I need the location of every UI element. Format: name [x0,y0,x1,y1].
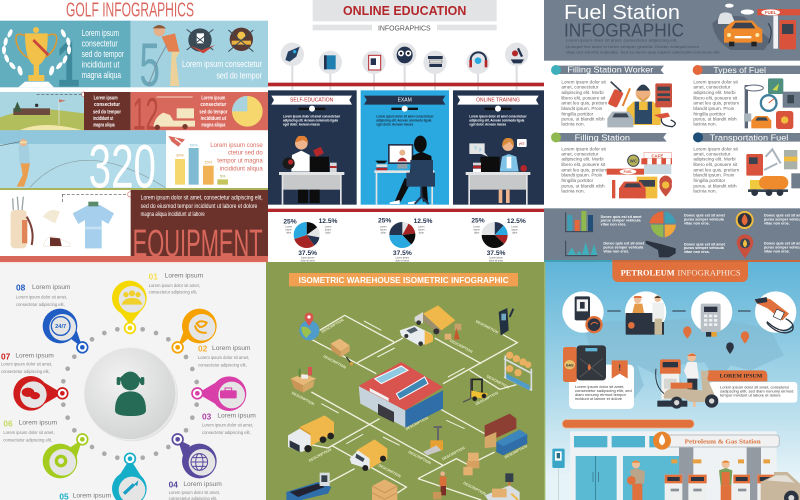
section: filling station: amet leo quis, pretium [561,167,607,172]
conveyor [286,473,331,500]
callout: lorem ipsum: LOREM IPSUM [720,374,763,380]
footer band: purus semper vehicula [684,217,725,221]
band: cart and pie: 12 [133,88,159,139]
title bar: ISOMETRIC WAREHOUSE ISOMETRIC INFOGRAPHIC [299,275,509,285]
arrow [738,310,751,312]
column: self-education [268,90,357,205]
pie chart: exam: 12.5% [414,218,433,225]
node 05 [59,453,147,500]
labels: DESCRIPTION [323,354,347,370]
section: filling station: adipiscing elit. Morbi [561,157,604,162]
step 4 fuel nozzle [755,291,796,333]
node 06: Lorem ipsum dolor sit amet, [3,430,55,435]
callout: jerrycan: GAS [566,363,574,367]
title bar [289,273,518,286]
section: filling station: libero elit, posuere sit [561,162,606,167]
bar chart: 15% [204,159,213,164]
band: trophy: 1 [57,28,80,101]
bar chart [166,130,268,189]
section: filling station: Lorem ipsum dolor sit [561,146,607,151]
band: cart and pie: magna aliqua [201,123,226,129]
node 01: consectetur adipiscing elit, [149,290,197,295]
section: types of fuel: fringilla porttitor [693,111,726,116]
section: transportation fuel: amet, consectetur [693,151,731,156]
section: filling station: Filling Station [575,132,630,142]
node 02: Lorem ipsum [212,345,251,352]
pie chart: online training: ipsum [474,229,480,231]
node 06: 06 [3,419,13,429]
section: filling station worker: amet, consectetur [561,85,599,90]
pie chart: self-education: 37.5% [298,250,317,257]
labels: DESCRIPTION [291,391,315,406]
section: filling station worker: lacinia non. [561,122,585,127]
callout: lorem ipsum: Lorem ipsum dolor sit amet, consetetur [720,385,790,390]
node 06: Lorem ipsum [19,420,58,427]
pie chart: exam: ipsum [418,229,424,231]
pie chart: exam [378,218,433,262]
node 02 [172,309,251,367]
labels: DESCRIPTION [504,444,528,460]
labels: DESCRIPTION [308,447,333,463]
callout: lorem ipsum [707,370,797,403]
labels: DESCRIPTION [321,318,345,334]
callout: jerrycan: consectetur sadipscing elitr, sed [575,388,632,393]
pie chart: online training: dolor [474,231,479,234]
arrows [321,321,465,445]
panel: isometric warehouse [268,262,544,500]
pie chart: exam: Lorem [380,225,387,228]
section: filling station: amet, consectetur [561,151,599,156]
title tab: PETROLEUM [621,268,675,277]
panel: petroleum infographics [544,262,800,500]
pie chart: self-education: 25% [283,218,297,225]
callout: jerrycan: Lorem ipsum dolor sit amet, [575,384,624,389]
section: filling station worker [551,64,675,127]
header: vitae orci lobortis vulputate. Sed eu lorem quis sapien sollicitudin commodo elit. [566,50,721,55]
callout: jerrycan: ! [618,362,621,372]
parked car [761,472,800,500]
section: filling station: CAFE [651,153,663,158]
node 06: consectetur adipiscing elit, [3,437,52,442]
text block: brown: consectetur [94,102,121,108]
bar chart: 30% [176,153,184,158]
footer band: Donec quis est sit amet [684,242,726,246]
band: cart and pie: Lorem ipsum [201,95,225,101]
band: trophy [0,21,131,101]
band: golfer and badges: 5 [139,31,160,100]
title banner: ONLINE EDUCATION [343,3,466,18]
labels: DESCRIPTION [449,339,473,354]
arrow [607,310,621,312]
bar chart: incididunt aliqua [220,166,263,172]
panel: golf infographics [0,0,268,265]
fuel pumps [665,475,774,500]
pie chart: self-education: ipsum [325,229,331,231]
section: transportation fuel: fringilla porttitor [693,178,726,183]
labels [291,318,528,496]
node 02: Lorem ipsum dolor sit amet, [198,355,249,360]
step 1 phone [562,291,604,333]
band: cart and pie [131,88,268,139]
callout: jerrycan: diam nonumy eirmod tempor [575,392,627,397]
world map backdrop [584,318,784,405]
section: filling station [551,132,672,198]
text block: equipment: magna aliqua incididunt ut labore [141,212,205,218]
column: self-education: adipiscing elit. Aenean commodo ligula [283,118,339,122]
pie chart: exam: dolor [419,231,424,234]
panel: online education [268,0,544,262]
callout: lorem ipsum: tempor invidunt ut labore et dolore [720,393,781,398]
title tab [612,262,748,282]
section: filling station worker: amet leo quis, pretium [561,101,607,106]
header [544,0,800,61]
footer band: vitae non eros. [764,249,790,253]
section: filling station worker: fringilla porttitor [561,111,594,116]
pins on map [683,326,749,354]
section: types of fuel: blandit ipsum. Proin [693,106,735,111]
orange bar [562,420,694,428]
pie chart: online training: ipsum [512,229,518,231]
labels: DESCRIPTION [378,463,402,479]
pie chart: exam: dolor [381,231,386,234]
pie chart: online training: 37.5% [487,250,506,257]
band: trophy: magna aliqua [82,70,121,80]
column: online training: ? [474,145,477,150]
node 02: consectetur adipiscing elit, [198,362,247,367]
footer band: Donec quis est sit amet [684,214,726,218]
node 01: 01 [149,271,158,281]
labels: DESCRIPTION [486,374,510,390]
callout: jerrycan: invidunt ut labore et dolore [575,396,623,401]
text block: equipment [131,190,268,265]
pie chart: online training: 12.5% [507,218,526,225]
pallet stack [372,479,397,500]
station building [570,431,777,500]
footer band: Donec quis est sit amet [601,215,642,219]
bar chart: ctetur sed do [228,151,263,157]
column: self-education: eget dolor. Aenean massa [283,122,320,126]
scale [485,473,520,500]
band: equipment illustrations [11,192,133,248]
section: types of fuel: Types of Fuel [713,65,766,75]
text block: brown: Lorem ipsum [94,95,118,101]
title tab: INFOGRAPHICS [677,268,741,277]
pie chart: exam: 25% [378,218,391,225]
labels: DESCRIPTION [475,391,499,406]
panel: fuel station [544,0,800,262]
header: Lorem ipsum dolor sit amet, consectetur adipiscing elit. [566,38,677,43]
section: types of fuel: amet, consectetur [693,85,731,90]
node 07: consectetur adipiscing elit, [1,369,50,374]
section: filling station: FUEL [624,170,632,174]
labels: DESCRIPTION [463,481,487,496]
column: exam: EXAM [398,98,412,104]
arrow [672,310,686,312]
column: online training: ? [479,148,482,153]
node 01 [112,271,204,333]
pie chart: self-education: ipsum [286,229,292,231]
node 03: 03 [202,411,212,421]
pie chart: self-education: dolor sit amet [301,259,315,262]
pie chart: online training: Lorem ipsum [489,256,503,259]
column: online training: eget dolor. Aenean massa [469,122,507,126]
station sign [653,432,779,450]
node 08: Lorem ipsum [32,284,71,291]
pie chart: online training: dolor [512,231,517,234]
station sign: Petroleum & Gas Station [685,438,761,445]
text block: brown: magna aliqua [93,123,115,129]
text block: brown: incididunt ut [93,116,113,122]
section: types of fuel: amet leo quis, pretium [693,101,739,106]
header: FUEL [765,10,777,15]
node 03 [192,376,256,435]
pie chart: exam: ipsum [380,229,386,231]
column: self-education: SELF-EDUCATION [290,98,334,104]
text block: brown [84,92,131,130]
column: online training: adipiscing elit. Aenean commodo ligula [469,118,525,122]
column: online training [453,90,544,205]
band: cart and pie: incididunt ut [201,116,226,122]
band: trophy: sed do tempor [82,49,124,59]
band: trophy: Lorem ipsum [82,28,119,38]
section: filling station worker: libero elit, posuere sit [561,95,606,100]
subtitle: INFOGRAPHICS [378,23,431,32]
flow lines [311,315,517,500]
section: filling station: lacinia non. [561,188,585,193]
footer band: purus semper vehicula [601,219,641,223]
step 3 payment terminal [691,291,732,337]
worker [433,471,446,499]
node 03: Lorem ipsum [217,412,256,419]
footer band: purus semper vehicula [603,245,644,249]
header: INFOGRAPHIC [564,19,684,40]
pump and scooter rider [656,353,718,409]
labels: DESCRIPTION [442,446,466,461]
big truck [288,415,334,452]
text block: brown: sed do tempor [93,109,122,115]
section: filling station worker: Filling Station Worker [567,64,654,74]
header: Fuel Station [564,1,680,24]
panel: circular process [0,262,268,500]
column: exam: eget dolor. Aenean massa [376,122,414,126]
section: filling station worker: blandit ipsum. Proin [561,106,603,111]
bar chart: Lorem ipsum conse [210,143,263,149]
pie chart: self-education: dolor [325,231,331,234]
section: types of fuel: purus, ut blandit nibh [693,117,737,122]
footer band: vitae non eros. [684,221,710,225]
footer band: purus semper vehicula [684,246,725,250]
pie chart: exam: dolor sit amet [395,259,410,262]
node 08: consectetur adipiscing elit, [16,302,65,307]
band: cart and pie: consectetur [200,102,227,108]
footer band: Donec quis est sit amet [603,242,645,246]
white car [400,325,433,346]
band: golfer and badges [131,21,268,100]
pie chart: exam: Lorem [418,225,425,228]
column: self-education: Lorem ipsum dolor sit amet consectetuer [283,114,341,118]
node 04: 04 [169,480,178,490]
node 06 [3,419,88,478]
node 07: Lorem ipsum dolor sit amet, [1,362,52,367]
pie chart: self-education: 12.5% [319,218,338,225]
section: types of fuel [693,65,800,129]
node 04: Lorem ipsum dolor sit amet, [169,490,220,495]
small van [350,439,387,471]
pie chart: exam: 37.5% [393,250,412,257]
node 08: Lorem ipsum dolor sit amet, [16,295,67,300]
column: exam: Lorem ipsum dolor sit amet consectetuer [376,114,434,118]
small phone sign [552,449,565,500]
section: filling station: blandit ipsum. Proin [561,173,603,178]
column: online training: ONLINE TRAINING [476,98,520,104]
section: filling station: purus, ut blandit nibh [561,183,605,188]
node 03: consectetur adipiscing elit, [202,430,251,435]
pallet jack [423,427,443,455]
band: trophy: consectetur [82,39,118,49]
shelves [504,352,532,390]
section: transportation fuel: lacinia non. [693,188,717,193]
section: filling station worker: adipiscing elit. Morbi [561,90,604,95]
labels: DESCRIPTION [408,450,432,465]
labels: DESCRIPTION [405,416,429,431]
section: transportation fuel [693,132,800,196]
node 01: Lorem ipsum [165,272,204,279]
node 05: Lorem ipsum [73,493,112,500]
attendants [627,460,732,500]
forklift [463,379,488,402]
band: cart and pie: sed do tempor [199,109,228,115]
callout: lorem ipsum: sadipscing elitr, sed diam nonumy eirmod [720,389,793,394]
scanner [499,308,513,335]
dotted ring [61,327,199,460]
footer band: vitae non eros. [684,250,710,254]
section: types of fuel: lacinia non. [693,122,717,127]
node 07: 07 [1,351,11,361]
node 08 [16,283,88,353]
node 04 [169,434,222,500]
node 04: Lorem ipsum [183,481,222,488]
bar chart: 50% [190,143,198,148]
band: course scene [0,92,86,130]
node 08: 08 [16,283,26,293]
pie chart: online training [471,218,526,262]
subtitle [313,23,497,32]
section: transportation fuel: amet leo quis, pretium [693,167,739,172]
pie chart: online training: dolor sit amet [489,259,503,262]
node 08: 24/7 [55,324,66,330]
pie chart: self-education [283,218,338,262]
pie chart: online training: Lorem [511,225,518,228]
header: Quisque leo dolor id tortor semper gravida. Donec volutpat lorem [566,44,700,49]
pie chart: online training: Lorem [473,225,480,228]
pie chart: self-education: Lorem [325,225,331,228]
node 01: Lorem ipsum dolor sit amet, [149,283,200,288]
section: filling station: fringilla porttitor [561,178,594,183]
section: transportation fuel: adipiscing elit. Morbi [693,157,736,162]
callout: jerrycan [563,345,634,409]
column: online training: yes [519,142,525,146]
section: filling station worker: purus, ut blandit nibh [561,117,605,122]
pie chart: self-education: Lorem ipsum [301,256,314,259]
section: transportation fuel: blandit ipsum. Proin [693,173,735,178]
section: types of fuel: libero elit, posuere sit [693,95,738,100]
bar chart: 5% [220,173,226,178]
section: transportation fuel: Lorem ipsum dolor sit [693,146,739,151]
step 2 counter [625,291,666,335]
pie chart: exam: Lorem ipsum [396,256,409,259]
pie chart: self-education: Lorem [285,225,292,228]
items box [291,367,316,393]
footer band: vitae non eros. [601,223,626,227]
boxes with hand truck [331,339,353,365]
bar chart: tempor ut magna [217,159,263,165]
node 07: Lorem ipsum [15,353,54,360]
pie chart: self-education: dolor [286,231,291,234]
globe with pin [299,313,319,340]
section: types of fuel: Lorem ipsum dolor sit [693,80,739,85]
band: drive distance 320 [0,130,166,201]
title banner [313,0,497,21]
section: transportation fuel: Transportation Fuel [710,132,788,142]
column: exam: adipiscing elit. Aenean commodo ligula [376,118,432,122]
band: trophy: incididunt ut [82,60,120,70]
containers [485,414,527,455]
footer band [544,208,800,262]
stacked boxes [463,453,479,475]
center agent icon [84,348,178,441]
section: filling station worker: Lorem ipsum dolor sit [561,80,607,85]
pie chart: online training: 25% [471,218,485,225]
warehouse [359,362,443,428]
section: transportation fuel: purus, ut blandit nibh [693,183,737,188]
section: types of fuel: adipiscing elit. Morbi [693,90,736,95]
section: transportation fuel: libero elit, posuere sit [693,162,738,167]
labels: DESCRIPTION [475,319,499,335]
icon row [281,43,528,90]
node 03: Lorem ipsum dolor sit amet, [202,423,253,428]
column: online training: Lorem ipsum dolor sit amet consectetuer [469,114,527,118]
band: drive distance 320: 320 [89,132,156,201]
section: filling station: WC [630,158,637,163]
footer band: vitae non eros. [603,249,629,253]
delivery van top [415,305,461,340]
node 02: 02 [198,344,208,354]
footer band: vitae non eros. [764,221,790,225]
node 07 [1,351,68,411]
column: exam [361,90,449,205]
